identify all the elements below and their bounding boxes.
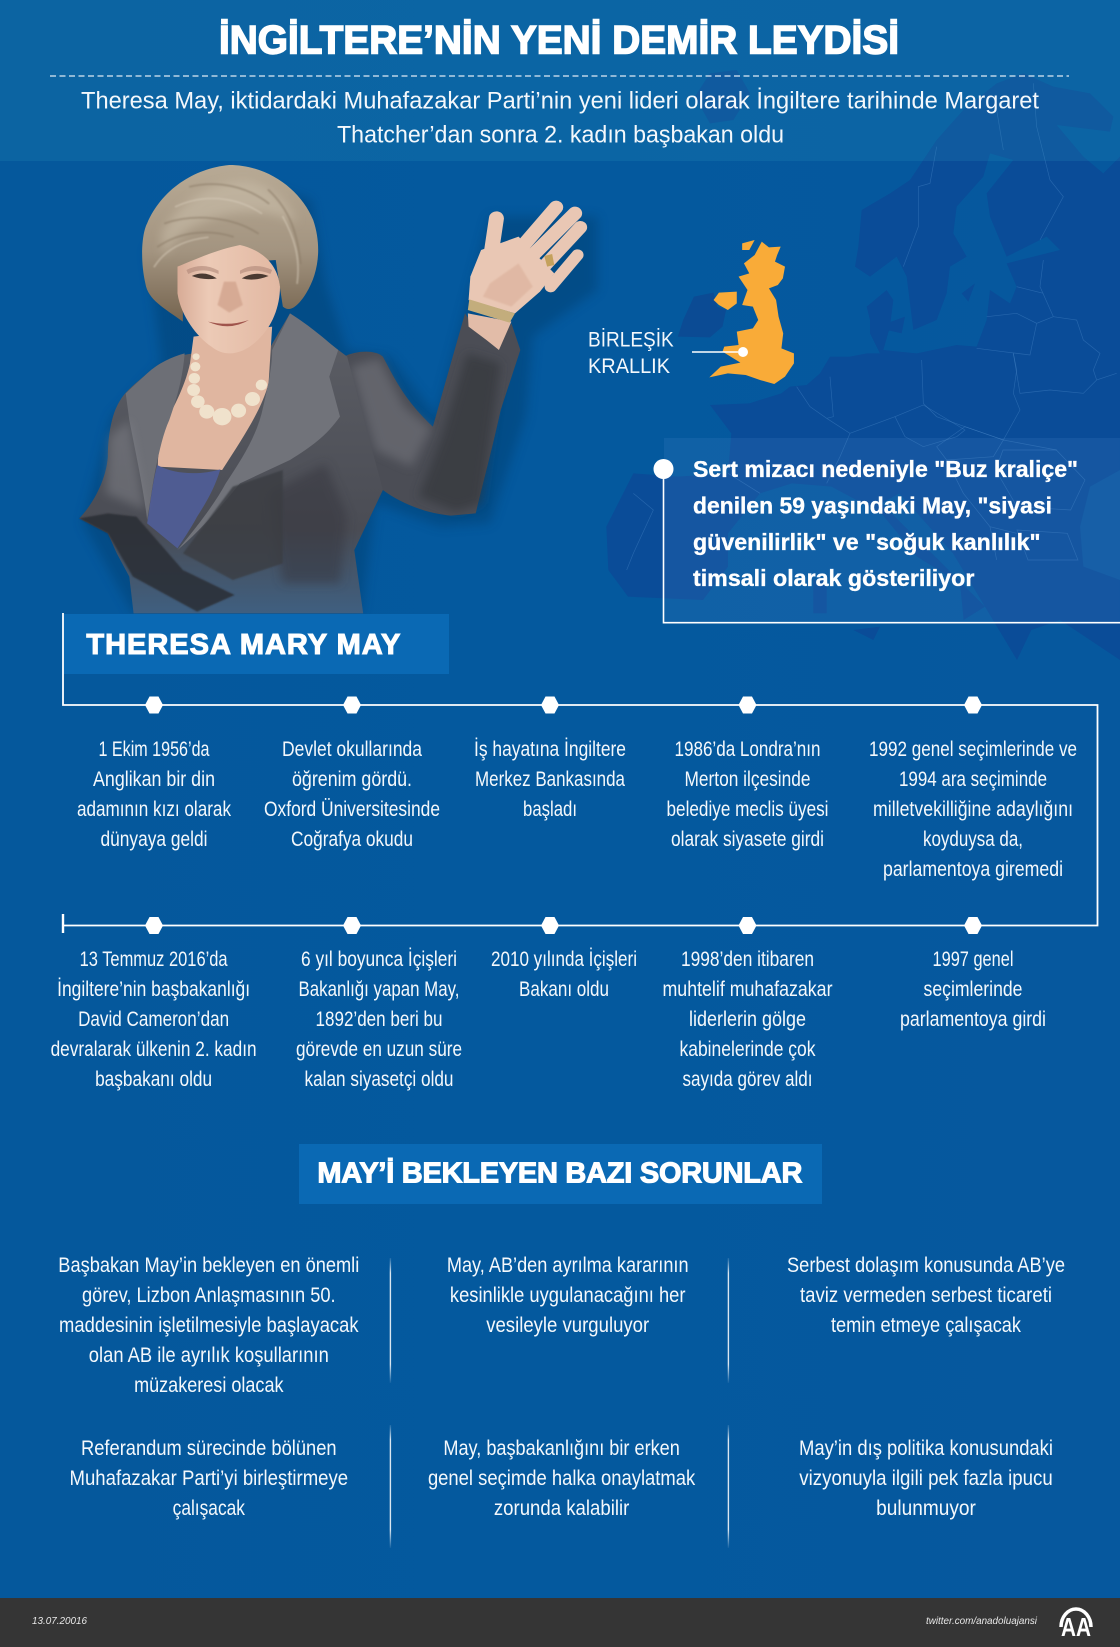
timeline: Bank of England: Merkez Bankasında (475, 768, 625, 791)
heading: problems awaiting May: MAY’İ BEKLEYEN BAZI SORUNLAR (317, 1158, 802, 1190)
timeline: six years home secretary: görevde en uzun süre (296, 1038, 462, 1061)
problem: early election (428, 1437, 696, 1520)
problem: foreign policy vision: bulunmuyor (876, 1497, 976, 1520)
callout text: güvenilirlik" ve "soğuk kanlılık" (693, 529, 1040, 555)
callout text: denilen 59 yaşındaki May, "siyasi (693, 492, 1052, 518)
timeline: education (264, 738, 440, 851)
jacket body (79, 313, 383, 613)
problem: early election: genel seçimde halka onaylatmak (428, 1467, 696, 1490)
problem: Lisbon article 50: olan AB ile ayrılık koşullarının (89, 1344, 329, 1367)
subtitle (81, 88, 1039, 149)
map: United Kingdom (678, 240, 794, 384)
problem: uniting the party: Referandum sürecinde bölünen (81, 1437, 337, 1460)
timeline: six years home secretary: kalan siyasetçi oldu (304, 1068, 454, 1091)
heading: Theresa Mary May: THERESA MARY MAY (86, 629, 400, 661)
timeline: Bank of England (474, 738, 626, 821)
label: Birleşik Krallık (588, 329, 748, 378)
heading: Theresa Mary May (64, 614, 449, 674)
timeline: 1986 Merton: olarak siyasete girdi (671, 828, 824, 851)
timeline: 1992 elections: milletvekilliğine adaylığını (873, 798, 1073, 821)
timeline: 1992 elections: 1994 ara seçiminde (899, 768, 1047, 791)
problem: EU exit decision (447, 1254, 689, 1337)
Great Britain (709, 242, 794, 384)
waving hand (491, 207, 580, 287)
problem: uniting the party: çalışacak (173, 1497, 245, 1520)
problem: Lisbon article 50: görev, Lizbon Anlaşmasının 50. (82, 1284, 336, 1307)
timeline: six years home secretary: Bakanlığı yapan May, (298, 978, 460, 1001)
callout text (693, 456, 1078, 591)
problem: Lisbon article 50 (58, 1254, 359, 1397)
timeline: education: Devlet okullarında (282, 738, 422, 761)
timeline: 1992 elections: koyduysa da, (923, 828, 1023, 851)
sleeve (344, 313, 520, 550)
timeline: 1997 parliament: seçimlerinde (924, 978, 1022, 1001)
problem: early election: May, başbakanlığını bir erken (443, 1437, 680, 1460)
timeline: 1998 shadow cabinet: liderlerin gölge (689, 1008, 806, 1031)
timeline: 1998 shadow cabinet (662, 948, 833, 1091)
problem: free movement (787, 1254, 1065, 1337)
timeline: 1986 Merton (666, 738, 828, 851)
problem: foreign policy vision (799, 1437, 1053, 1520)
timeline: 1998 shadow cabinet: sayıda görev aldı (682, 1068, 812, 1091)
problem: EU exit decision: May, AB’den ayrılma kararının (447, 1254, 689, 1277)
timeline: education: öğrenim gördü. (292, 768, 412, 791)
heading: problems awaiting May (299, 1144, 822, 1204)
problem: free movement: Serbest dolaşım konusunda AB’ye (787, 1254, 1065, 1277)
problem: Lisbon article 50: müzakeresi olacak (134, 1374, 284, 1397)
timeline: six years home secretary: 6 yıl boyunca İçişleri (301, 948, 457, 971)
timeline: 2016 prime minister: İngiltere’nin başbakanlığı (57, 978, 250, 1001)
callout panel (664, 438, 1120, 623)
timeline: 2016 prime minister: başbakanı oldu (95, 1068, 212, 1091)
problem: free movement: taviz vermeden serbest ticareti (800, 1284, 1052, 1307)
timeline: six years home secretary: 1892’den beri bu (316, 1008, 442, 1031)
timeline: education: Coğrafya okudu (291, 828, 413, 851)
timeline: 2016 prime minister (51, 948, 257, 1091)
hair (142, 165, 318, 322)
timeline: 2016 prime minister: David Cameron’dan (78, 1008, 229, 1031)
timeline: 1998 shadow cabinet: muhtelif muhafazakar (662, 978, 833, 1001)
problem: EU exit decision: kesinlikle uygulanacağını her (450, 1284, 686, 1307)
timeline: Bank of England: İş hayatına İngiltere (474, 738, 626, 761)
callout: character note (654, 438, 1120, 623)
problem: Lisbon article 50: Başbakan May’in bekleyen en önemli (58, 1254, 359, 1277)
callout text: timsali olarak gösteriliyor (693, 565, 974, 591)
timeline: 1956 birth: dünyaya geldi (100, 828, 208, 851)
map: Europe background (606, 70, 1120, 660)
shirt and skin (158, 327, 272, 470)
photo: Theresa May waving (79, 165, 597, 613)
problem: free movement: temin etmeye çalışacak (831, 1314, 1021, 1337)
subtitle: Thatcher’dan sonra 2. kadın başbakan oldu (337, 122, 784, 149)
header band (0, 0, 1120, 161)
timeline: 1997 parliament (900, 948, 1046, 1031)
face (177, 245, 280, 353)
timeline: 1986 Merton: 1986’da Londra’nın (674, 738, 820, 761)
timeline: 1956 birth: adamının kızı olarak (77, 798, 231, 821)
timeline: 2010 minister: 2010 yılında İçişleri (491, 948, 637, 971)
timeline: 2010 minister (491, 948, 637, 1001)
label: Birleşik Krallık: KRALLIK (588, 355, 670, 378)
timeline: 1956 birth (77, 738, 231, 851)
callout text: Sert mizacı nedeniyle "Buz kraliçe" (693, 456, 1078, 482)
problem: foreign policy vision: vizyonuyla ilgili pek fazla ipucu (799, 1467, 1053, 1490)
pearl necklace (187, 353, 267, 425)
problem: foreign policy vision: May’in dış politika konusundaki (799, 1437, 1053, 1460)
timeline line (63, 613, 1098, 934)
problem: uniting the party: Muhafazakar Parti’yi birleştirmeye (70, 1467, 348, 1490)
source link: twitter.com/anadoluajansi (926, 1616, 1038, 1627)
timeline: six years home secretary (296, 948, 462, 1091)
timeline: 1997 parliament: 1997 genel (932, 948, 1014, 971)
problem: early election: zorunda kalabilir (494, 1497, 629, 1520)
lapels (177, 313, 340, 550)
timeline: 1956 birth: Anglikan bir din (93, 768, 215, 791)
timeline: Bank of England: başladı (523, 798, 577, 821)
problem: uniting the party (70, 1437, 348, 1520)
title: İNGİLTERE’NİN YENİ DEMİR LEYDİSİ (219, 18, 899, 62)
problem: EU exit decision: vesileyle vurguluyor (486, 1314, 649, 1337)
icon: AA logo: AA (1061, 1612, 1091, 1642)
timeline: 1998 shadow cabinet: kabinelerinde çok (680, 1038, 816, 1061)
timeline: education: Oxford Üniversitesinde (264, 798, 440, 821)
subtitle: Theresa May, iktidardaki Muhafazakar Parti’nin yeni lideri olarak İngiltere tarihinde Margaret (81, 88, 1039, 114)
timeline: 1956 birth: 1 Ekim 1956’da (98, 738, 210, 761)
footer bar (0, 1598, 1120, 1647)
Ireland (678, 293, 726, 337)
timeline: 1998 shadow cabinet: 1998’den itibaren (681, 948, 814, 971)
problem: Lisbon article 50: maddesinin işletilmesiyle başlayacak (59, 1314, 359, 1337)
timeline: 1992 elections (869, 738, 1077, 881)
timeline: 1992 elections: 1992 genel seçimlerinde ve (869, 738, 1077, 761)
timeline: 2016 prime minister: 13 Temmuz 2016’da (80, 948, 228, 971)
timeline: 1997 parliament: parlamentoya girdi (900, 1008, 1046, 1031)
timeline: 1986 Merton: Merton ilçesinde (684, 768, 810, 791)
timeline: 2016 prime minister: devralarak ülkenin 2. kadın (51, 1038, 257, 1061)
timeline: 2010 minister: Bakanı oldu (519, 978, 609, 1001)
timeline: 1986 Merton: belediye meclis üyesi (666, 798, 828, 821)
date: 13.07.20016 (32, 1616, 87, 1627)
timeline: 1992 elections: parlamentoya giremedi (883, 858, 1063, 881)
label: Birleşik Krallık: BİRLEŞİK (588, 329, 674, 352)
Northern Ireland (714, 292, 737, 310)
